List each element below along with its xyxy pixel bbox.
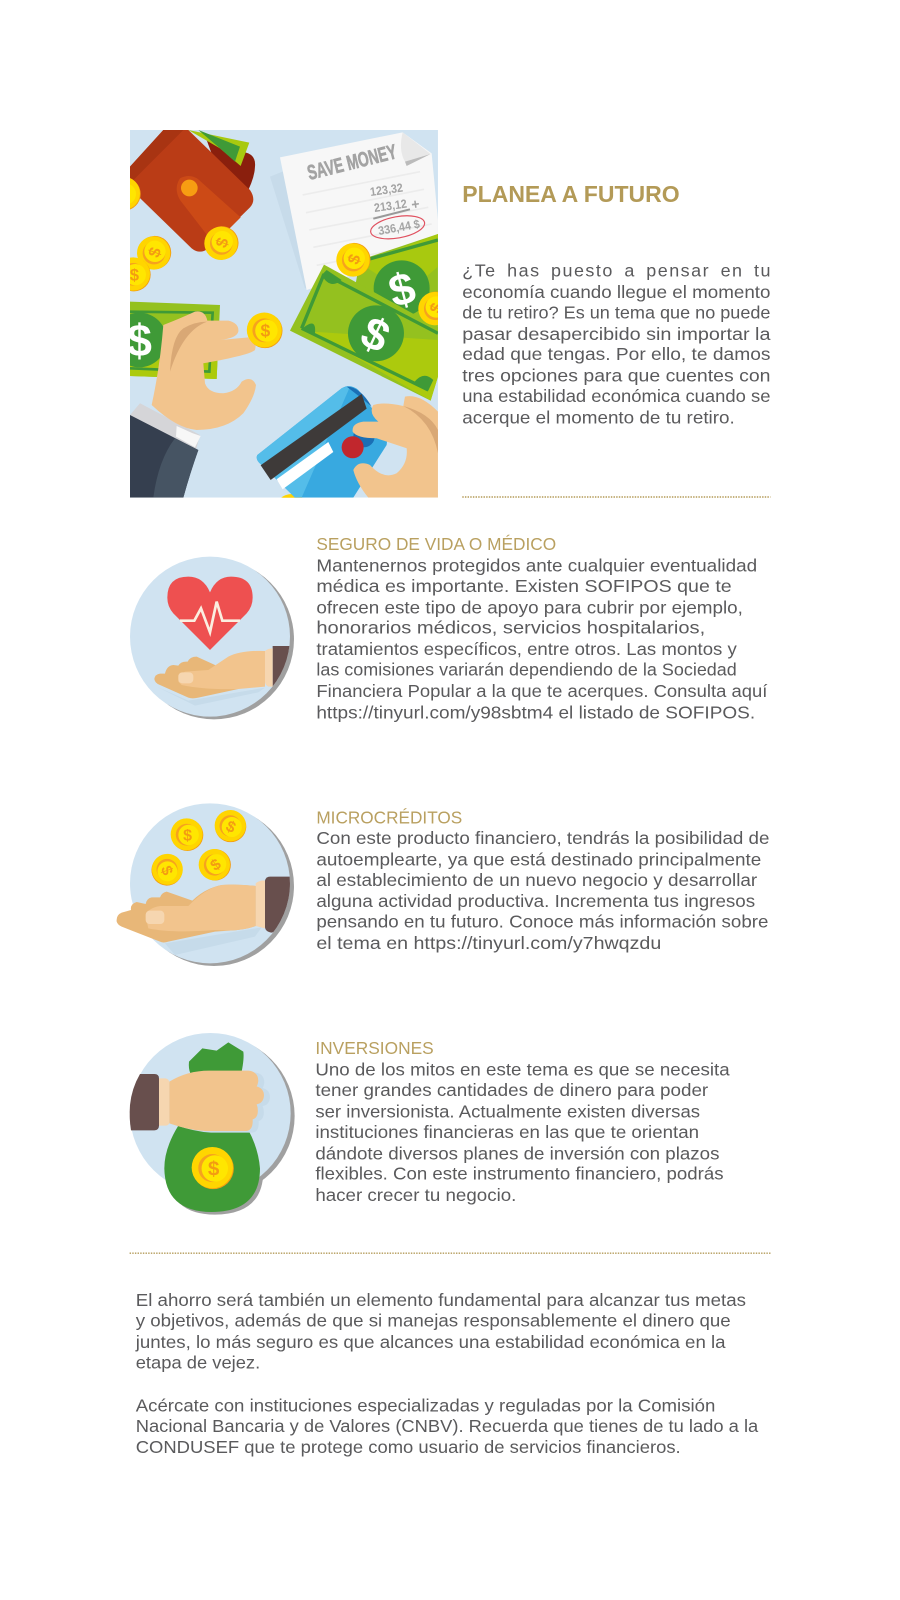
closing text: Nacional Bancaria y de Valores (CNBV). Recuerda que tienes de tu lado a la [136, 1416, 758, 1436]
intro text block: una estabilidad económica cuando se [462, 386, 770, 406]
intro text block: ¿Te has puesto a pensar en tu [462, 261, 770, 281]
receipt: 123,32 [369, 182, 404, 199]
closing text [135, 1290, 758, 1457]
icon: money bag in fist [130, 1033, 295, 1215]
section text: microcreditos [316, 828, 769, 953]
section text: seguro [316, 555, 767, 722]
wallet [130, 130, 255, 252]
section text: seguro: médica es importante. Existen SOFIPOS que te [316, 576, 732, 596]
banknotes right [290, 234, 438, 401]
section text: inversiones: hacer crecer tu negocio. [315, 1185, 516, 1205]
illustration: money, wallet, receipt and card [130, 130, 438, 498]
banknotes right: $ [353, 306, 398, 363]
closing text: etapa de vejez. [136, 1352, 260, 1372]
closing text: Acércate con instituciones especializadas y reguladas por la Comisión [136, 1395, 715, 1415]
section text: seguro: las comisiones variarán dependiendo de la Sociedad [316, 660, 737, 680]
receipt [270, 132, 438, 290]
section text: microcreditos: al establecimiento de un nuevo negocio y desarrollar [316, 870, 757, 890]
section text: seguro: tratamientos específicos, entre otros. Las montos y [316, 639, 737, 659]
closing text: El ahorro será también un elemento fundamental para alcanzar tus metas [136, 1290, 746, 1310]
section text: seguro: Financiera Popular a la que te acerques. Consulta aquí [316, 681, 767, 701]
hand with coin [130, 311, 283, 498]
section text: seguro: honorarios médicos, servicios hospitalarios, [316, 618, 705, 638]
open hand [154, 646, 292, 706]
open hand [117, 877, 292, 955]
intro text block: pasar desapercibido sin importar la [462, 324, 770, 344]
intro text block: edad que tengas. Por ello, te damos [462, 344, 770, 364]
icon: heart in hand [130, 557, 294, 719]
banknotes right: $ [383, 262, 421, 317]
closing text: CONDUSEF que te protege como usuario de servicios financieros. [136, 1437, 681, 1457]
receipt: 336,44 $ [377, 218, 421, 238]
falling coins [147, 805, 252, 890]
credit card [257, 386, 388, 498]
receipt: SAVE MONEY [305, 140, 399, 185]
section title: microcreditos: MICROCRÉDITOS [316, 808, 462, 828]
section title: inversiones: INVERSIONES [315, 1038, 434, 1058]
intro text block: acerque el momento de tu retiro. [462, 408, 735, 428]
section text: inversiones: flexibles. Con este instrumento financiero, podrás [315, 1164, 724, 1184]
section text: microcreditos: Con este producto financiero, tendrás la posibilidad de [316, 828, 769, 848]
section text: microcreditos: pensando en tu futuro. Conoce más información sobre [316, 912, 768, 932]
closing text: juntes, lo más seguro es que alcances una estabilidad económica en la [135, 1332, 726, 1352]
section text: microcreditos: autoemplearte, ya que está destinado principalmente [316, 849, 761, 869]
section title: seguro: SEGURO DE VIDA O MÉDICO [316, 534, 556, 554]
section text: inversiones: instituciones financieras en las que te orientan [315, 1122, 699, 1142]
section text: inversiones [315, 1060, 730, 1205]
receipt: + [410, 195, 420, 212]
section text: inversiones: dándote diversos planes de inversión con plazos [315, 1143, 719, 1163]
banknote left [130, 302, 220, 379]
hand holding card [353, 396, 438, 498]
coins [130, 178, 438, 498]
closing text: y objetivos, además de que si manejas responsablemente el dinero que [136, 1311, 731, 1331]
section text: seguro: https://tinyurl.com/y98sbtm4 el listado de SOFIPOS. [316, 702, 755, 722]
section text: microcreditos: alguna actividad productiva. Incrementa tus ingresos [316, 891, 755, 911]
money bag [164, 1042, 260, 1212]
section text: seguro: ofrecen este tipo de apoyo para cubrir por ejemplo, [316, 597, 743, 617]
intro text block: tres opciones para que cuentes con [462, 366, 770, 386]
intro text block [462, 261, 770, 428]
section text: inversiones: Uno de los mitos en este tema es que se necesita [315, 1060, 730, 1080]
section text: seguro: Mantenernos protegidos ante cualquier eventualidad [316, 555, 757, 575]
intro text block: de tu retiro? Es un tema que no puede [462, 302, 770, 322]
intro text block: economía cuando llegue el momento [462, 282, 770, 302]
section text: inversiones: ser inversionista. Actualmente existen diversas [315, 1101, 700, 1121]
banknote left: $ [127, 315, 152, 366]
fist [130, 1071, 270, 1133]
heading: PLANEA A FUTURO [462, 181, 680, 207]
section text: inversiones: tener grandes cantidades de dinero para poder [315, 1080, 708, 1100]
receipt: 213,12 [373, 198, 408, 215]
section text: microcreditos: el tema en https://tinyurl.com/y7hwqzdu [316, 933, 661, 953]
heart with pulse [167, 577, 253, 650]
icon: coins over hand [117, 803, 294, 966]
